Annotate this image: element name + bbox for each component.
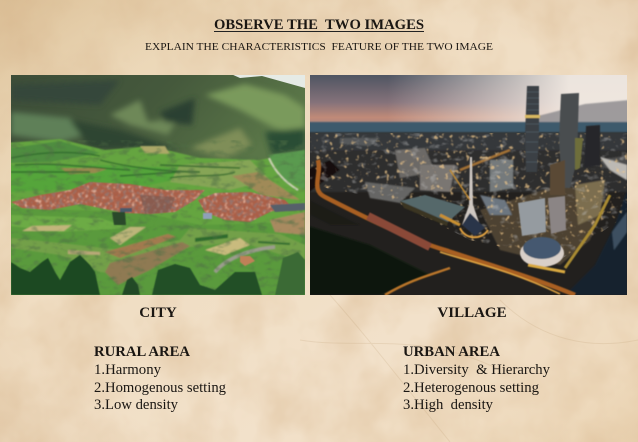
sea xyxy=(305,122,635,133)
text block: urban area: 2.Heterogenous setting xyxy=(403,380,539,396)
text block: urban area: 1.Diversity & Hierarchy xyxy=(403,362,550,378)
distant city xyxy=(305,132,635,192)
text block: urban area xyxy=(403,344,550,413)
trees xyxy=(11,255,100,295)
waterfront lights xyxy=(565,195,610,268)
text block: rural area: 1.Harmony xyxy=(94,362,161,378)
spire xyxy=(462,157,480,225)
lit podium xyxy=(480,185,605,265)
photo: urban skyline at dusk xyxy=(305,75,635,295)
text block: urban area: 3.High density xyxy=(403,397,493,413)
towers xyxy=(525,86,539,172)
photo: rural terraced hillside village xyxy=(5,70,310,300)
convention hall xyxy=(400,195,465,222)
mountain xyxy=(5,70,305,170)
text block: urban area: URBAN AREA xyxy=(403,344,500,360)
arena xyxy=(519,245,565,268)
heading: city: CITY xyxy=(139,305,177,321)
title: OBSERVE THE TWO IMAGES xyxy=(214,17,424,33)
river xyxy=(570,193,627,295)
subtitle: EXPLAIN THE CHARACTERISTICS FEATURE OF THE TWO IMAGE xyxy=(145,41,493,53)
sky xyxy=(310,75,560,123)
park xyxy=(305,225,430,295)
lower fields xyxy=(11,209,274,258)
text block: rural area: RURAL AREA xyxy=(94,344,190,360)
text block: rural area xyxy=(94,344,226,413)
village rooftops xyxy=(11,180,305,295)
terraces xyxy=(5,139,305,230)
heading: village: VILLAGE xyxy=(437,305,507,321)
freeway lights xyxy=(317,160,575,295)
text block: rural area: 2.Homogenous setting xyxy=(94,380,226,396)
text block: rural area: 3.Low density xyxy=(94,397,178,413)
